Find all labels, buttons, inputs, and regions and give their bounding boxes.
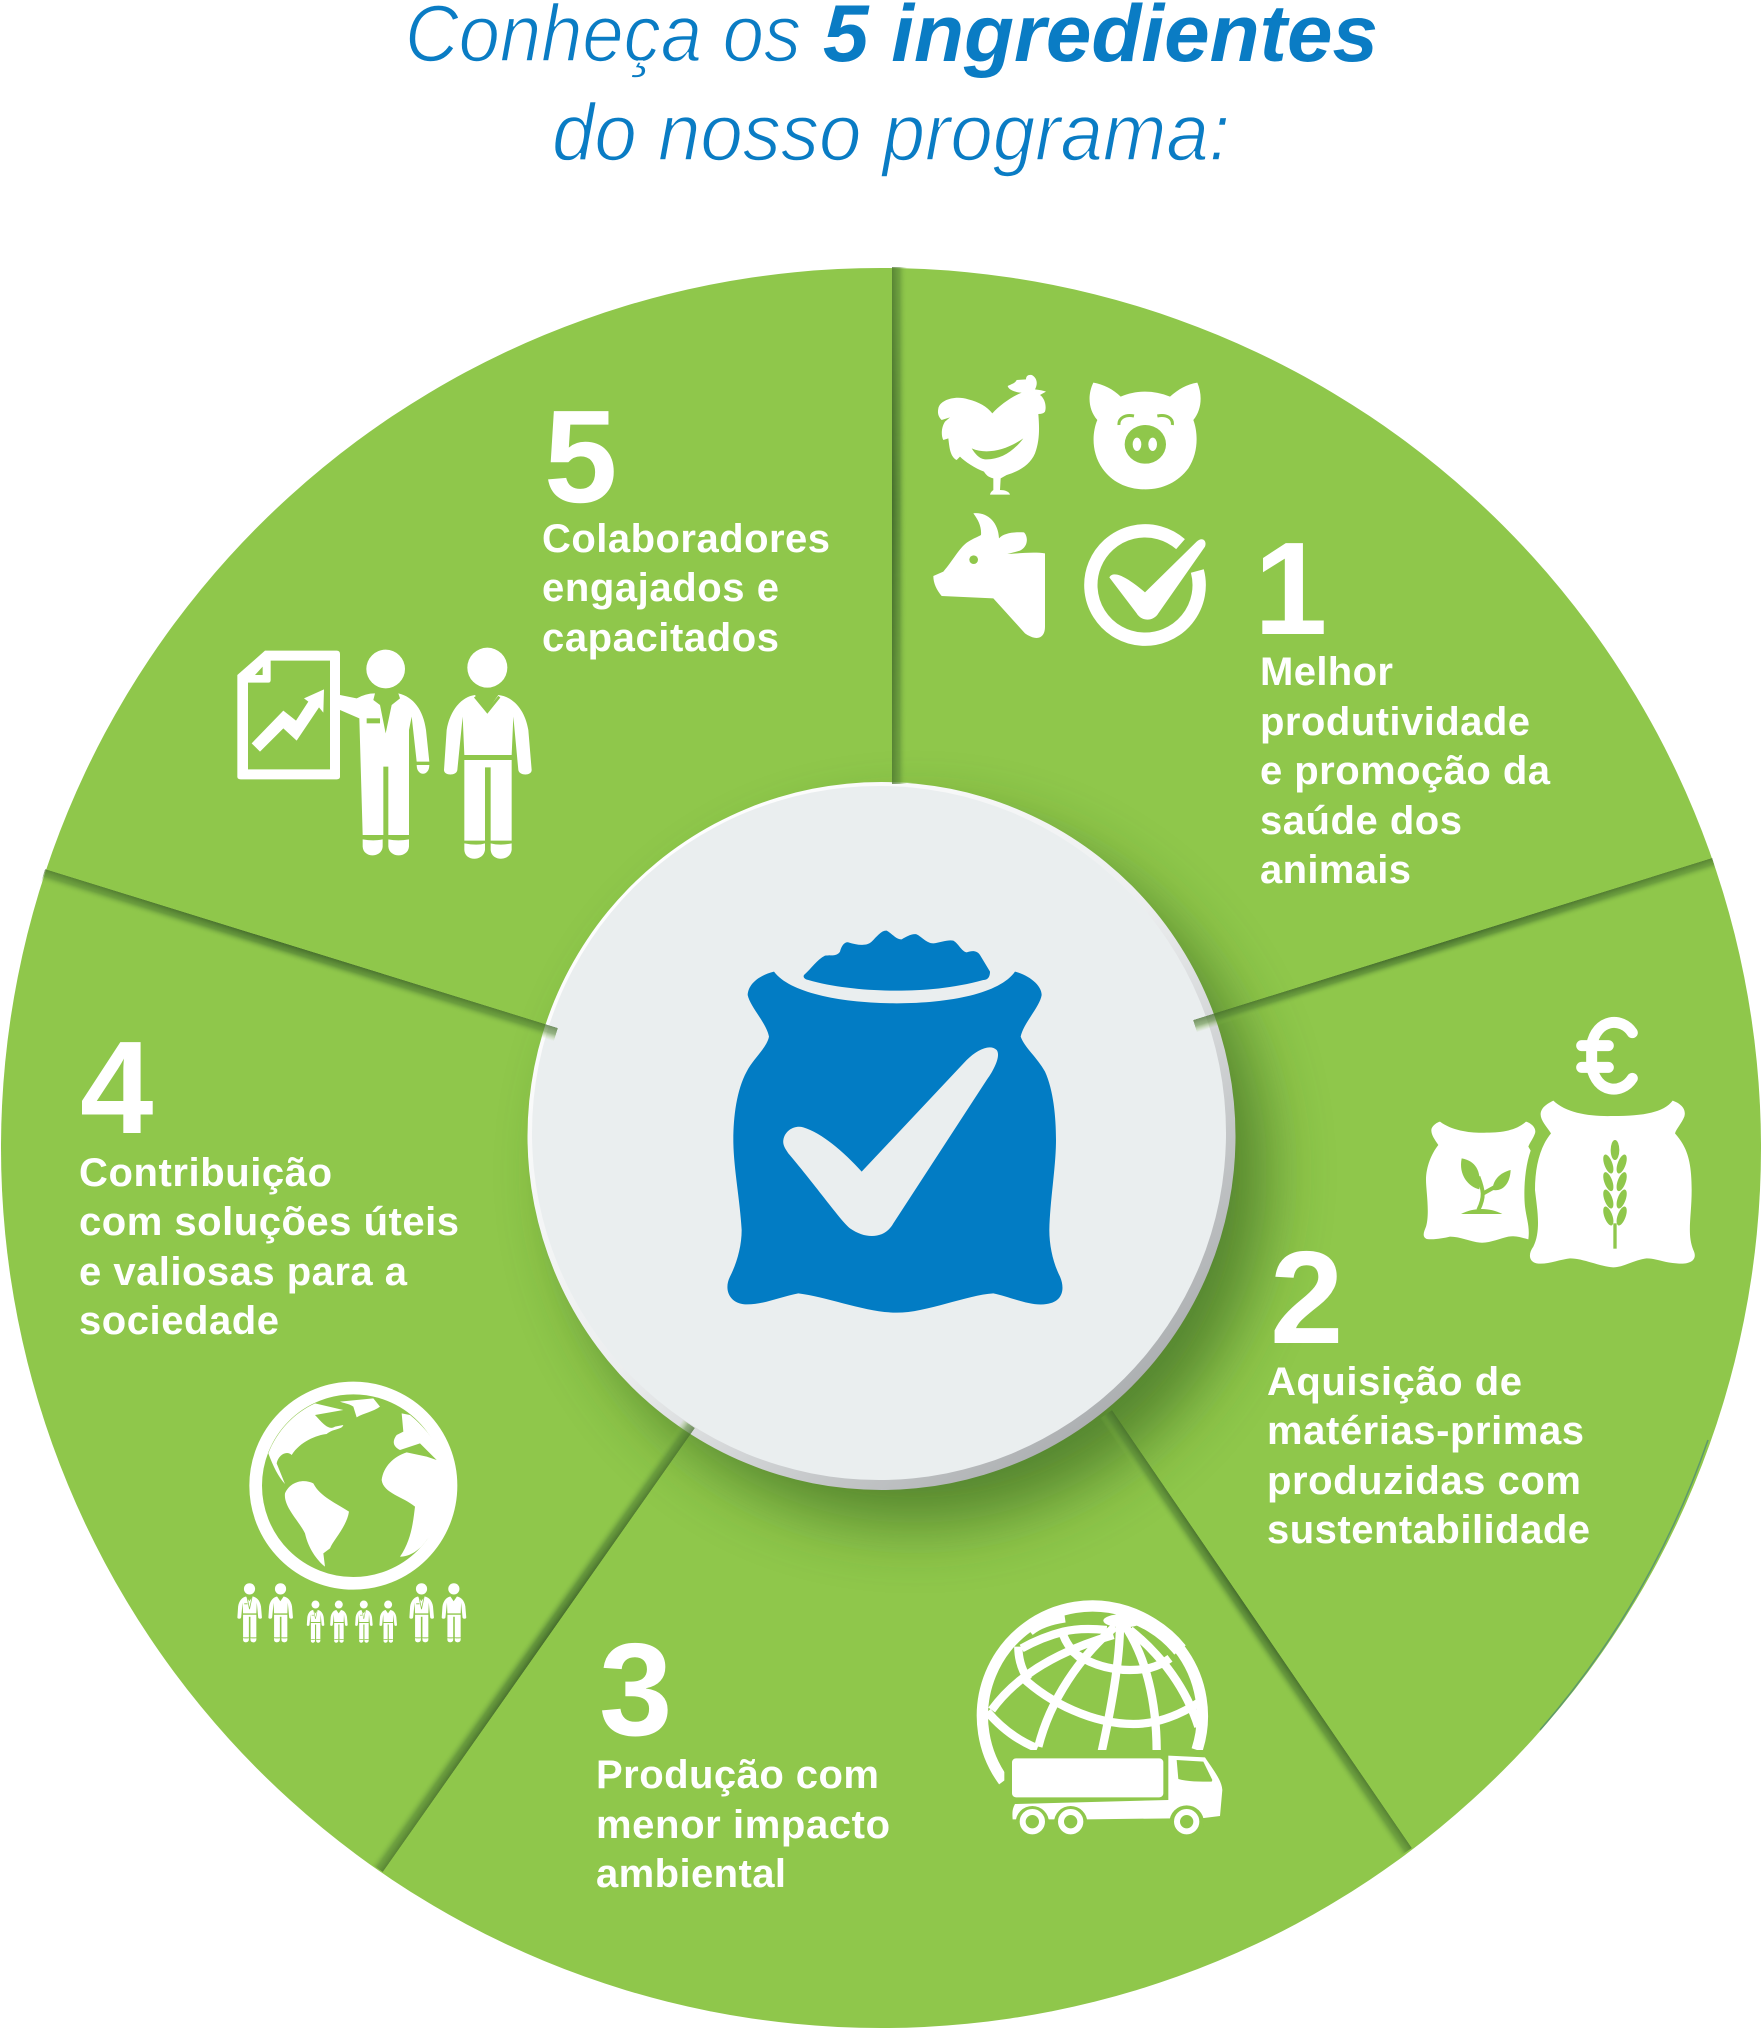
panel 1: animal health bbox=[933, 375, 1551, 892]
icon: earth bbox=[256, 1388, 451, 1583]
text: panel 5 bbox=[542, 517, 830, 660]
text: panel 5: Colaboradores bbox=[542, 517, 830, 561]
text: panel 2: sustentabilidade bbox=[1267, 1508, 1590, 1552]
text: panel 5: capacitados bbox=[542, 616, 779, 660]
number 4: 4 bbox=[80, 1014, 153, 1161]
icon: row of people bbox=[237, 1583, 466, 1643]
icon: presenter with chart and colleague bbox=[237, 648, 532, 859]
icon: rooster bbox=[938, 375, 1046, 495]
text: panel 4: Contribuição bbox=[79, 1151, 332, 1195]
text: panel 1: produtividade bbox=[1260, 700, 1530, 744]
text: panel 3 bbox=[596, 1753, 890, 1896]
dividers bbox=[41, 267, 1716, 1872]
text: panel 5: engajados e bbox=[542, 566, 779, 610]
number 3: 3 bbox=[599, 1616, 672, 1763]
center circle shadow bbox=[563, 820, 1267, 1524]
text: panel 4: e valiosas para a bbox=[79, 1250, 408, 1294]
title bbox=[405, 0, 1378, 178]
icon: euro and sacks bbox=[1424, 1022, 1695, 1267]
text: panel 1: animais bbox=[1260, 848, 1411, 892]
text: panel 2: produzidas com bbox=[1267, 1459, 1581, 1503]
text: panel 3: Produção com bbox=[596, 1753, 879, 1797]
panel 4: contribution to society bbox=[79, 1014, 466, 1643]
icon: pig bbox=[1090, 383, 1201, 489]
text: panel 4: com soluções úteis bbox=[79, 1200, 459, 1244]
text: panel 1 bbox=[1260, 650, 1551, 892]
title: do nosso programa: bbox=[552, 88, 1230, 178]
icon: central feed bag with check bbox=[727, 931, 1062, 1313]
center circle bbox=[528, 782, 1236, 1490]
icon: cow bbox=[933, 513, 1045, 638]
text: panel 2: Aquisição de bbox=[1267, 1360, 1522, 1404]
panel 5: engaged collaborators bbox=[237, 383, 830, 859]
text: panel 1: saúde dos bbox=[1260, 799, 1462, 843]
text: panel 4: sociedade bbox=[79, 1299, 279, 1343]
text: panel 1: Melhor bbox=[1260, 650, 1393, 694]
text: panel 3: ambiental bbox=[596, 1852, 786, 1896]
panel 3: lower impact production bbox=[596, 1606, 1222, 1896]
text: panel 2: matérias-primas bbox=[1267, 1409, 1584, 1453]
number 2: 2 bbox=[1270, 1224, 1343, 1371]
icon: check circle bbox=[1091, 531, 1206, 639]
number 1: 1 bbox=[1254, 515, 1327, 662]
text: panel 1: e promoção da bbox=[1260, 749, 1551, 793]
panel 2: raw materials bbox=[1267, 1022, 1695, 1552]
text: panel 2 bbox=[1267, 1360, 1590, 1552]
number 5: 5 bbox=[544, 383, 617, 530]
text: panel 3: menor impacto bbox=[596, 1803, 890, 1847]
icon: globe and truck bbox=[982, 1606, 1222, 1840]
text: panel 4 bbox=[79, 1151, 459, 1343]
